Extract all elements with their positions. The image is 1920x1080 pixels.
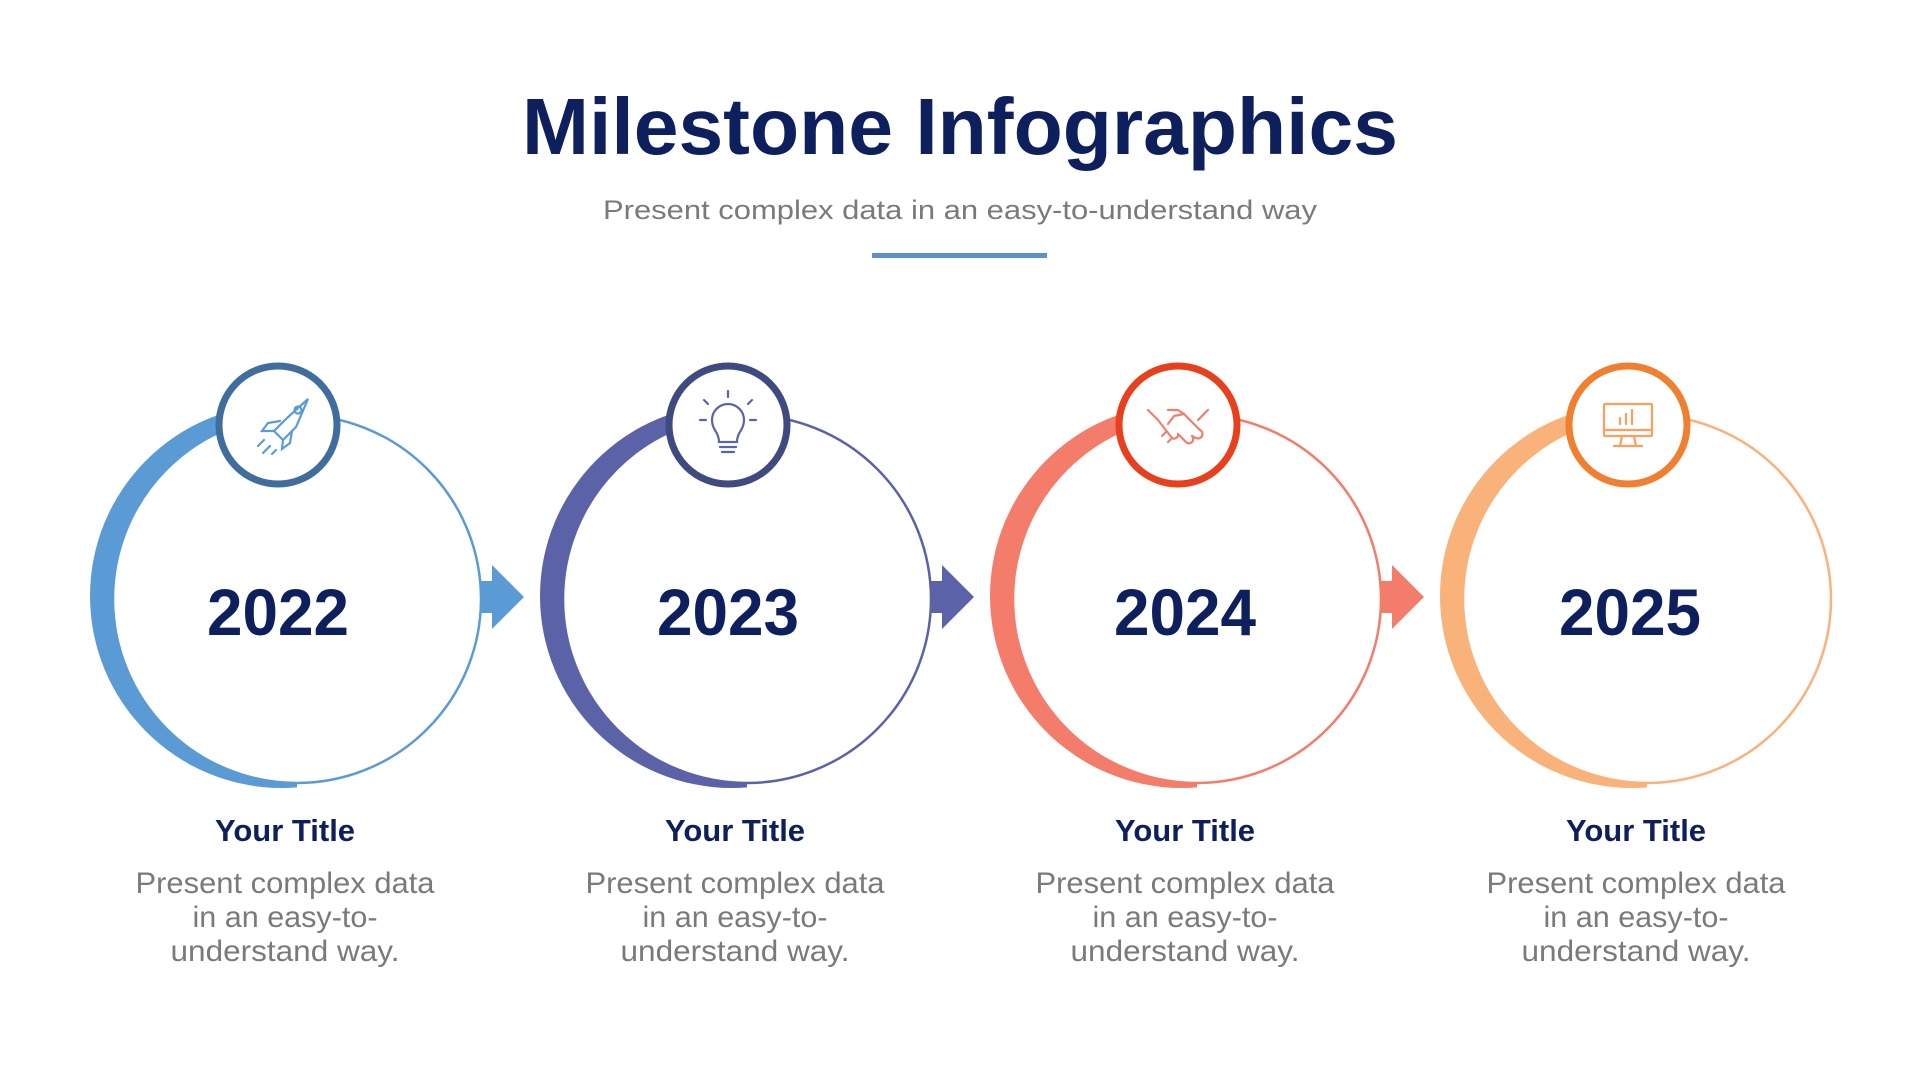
text block 2: understand way.	[620, 935, 850, 968]
text block 4	[1486, 813, 1786, 968]
text block 2: Your Title	[665, 813, 805, 848]
icon: monitor chart	[1569, 366, 1687, 484]
milestone 2025	[1440, 366, 1831, 788]
text block 2: in an easy-to-	[642, 901, 828, 934]
year 2025: 2025	[1559, 575, 1701, 649]
icon: rocket	[219, 366, 337, 484]
icon: light bulb	[669, 366, 787, 484]
text block 1: in an easy-to-	[192, 901, 378, 934]
arrow 1	[470, 565, 524, 629]
text block 1: Your Title	[215, 813, 355, 848]
text block 4: Your Title	[1566, 813, 1706, 848]
subtitle: Present complex data in an easy-to-understand way	[603, 195, 1318, 225]
title underline	[872, 253, 1047, 258]
text block 3: in an easy-to-	[1092, 901, 1278, 934]
text block 3: understand way.	[1070, 935, 1300, 968]
year 2023: 2023	[657, 575, 799, 649]
text block 1: understand way.	[170, 935, 400, 968]
title: Milestone Infographics	[522, 82, 1398, 171]
milestone 2024	[990, 366, 1424, 788]
milestone 2022	[90, 366, 524, 788]
text block 4: Present complex data	[1486, 867, 1786, 900]
text block 3	[1036, 813, 1335, 968]
text block 1	[136, 813, 435, 968]
milestone 2023	[540, 366, 974, 788]
text block 3: Present complex data	[1036, 867, 1335, 900]
arrow 2	[920, 565, 974, 629]
icon: handshake	[1119, 366, 1237, 484]
text block 2	[586, 813, 885, 968]
arrow 3	[1370, 565, 1424, 629]
text block 2: Present complex data	[586, 867, 885, 900]
text block 4: in an easy-to-	[1544, 901, 1728, 934]
text block 4: understand way.	[1522, 935, 1750, 968]
year 2022: 2022	[207, 575, 349, 649]
text block 1: Present complex data	[136, 867, 435, 900]
year 2024: 2024	[1114, 575, 1256, 649]
text block 3: Your Title	[1115, 813, 1255, 848]
